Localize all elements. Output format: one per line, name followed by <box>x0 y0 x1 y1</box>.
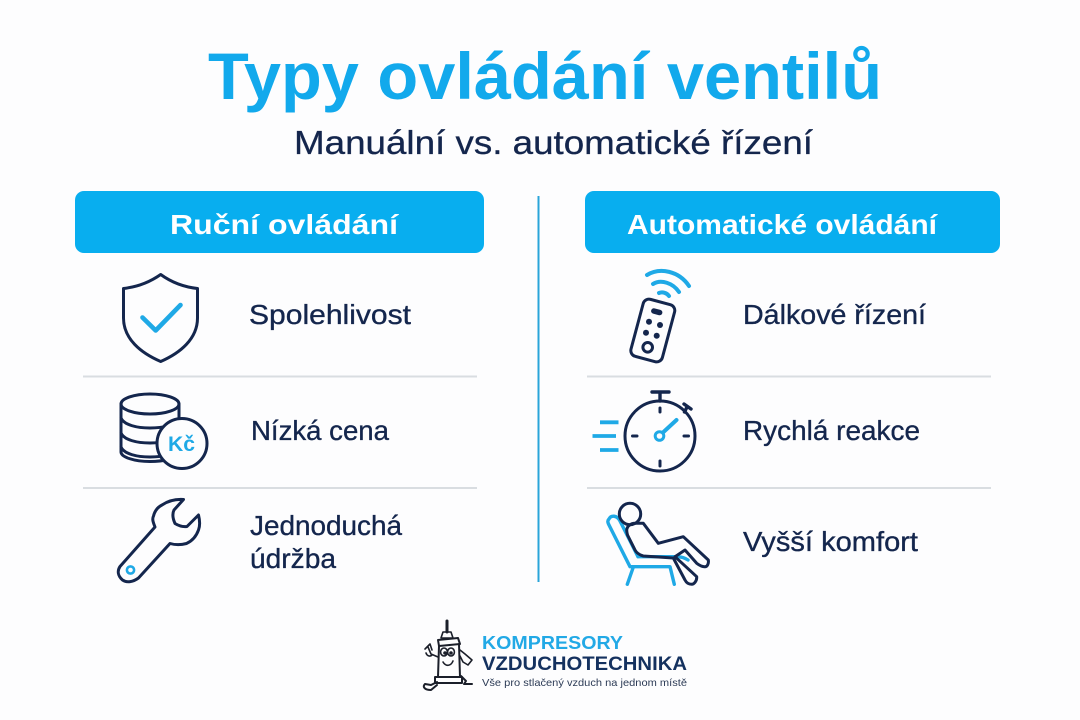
heading: automatic control <box>585 191 1000 253</box>
label: low price: Nízká cena <box>251 415 389 446</box>
subtitle: Manuální vs. automatické řízení <box>294 124 813 161</box>
heading: manual control <box>75 191 484 253</box>
label: remote control: Dálkové řízení <box>743 299 926 330</box>
label: simple maintenance: Jednoduchá <box>250 510 402 541</box>
heading: manual control: Ruční ovládání <box>170 209 399 240</box>
label: reliability: Spolehlivost <box>249 299 411 330</box>
icon: remote control <box>629 271 689 363</box>
panel: automatic control <box>585 191 1000 584</box>
heading: automatic control: Automatické ovládání <box>627 209 938 240</box>
icon: shield with check <box>124 274 198 362</box>
title: Typy ovládání ventilů <box>208 39 882 113</box>
icon: person relaxing in chair <box>608 503 708 584</box>
logo <box>424 621 687 690</box>
label: simple maintenance <box>250 510 402 574</box>
logo: VZDUCHOTECHNIKA <box>482 653 687 675</box>
label: fast response: Rychlá reakce <box>743 415 920 446</box>
brand name: KOMPRESORY <box>482 632 624 653</box>
panel: manual control <box>75 191 484 582</box>
tagline: Vše pro stlačený vzduch na jednom místě <box>482 677 687 689</box>
icon: wrench <box>118 499 200 582</box>
icon: coins with Kč <box>121 394 207 468</box>
icon: compressor mascot <box>424 621 472 690</box>
label: simple maintenance: údržba <box>250 543 336 574</box>
icon: coins with Kč: Kč <box>168 433 195 456</box>
label: higher comfort: Vyšší komfort <box>743 526 918 557</box>
icon: stopwatch <box>592 392 695 471</box>
